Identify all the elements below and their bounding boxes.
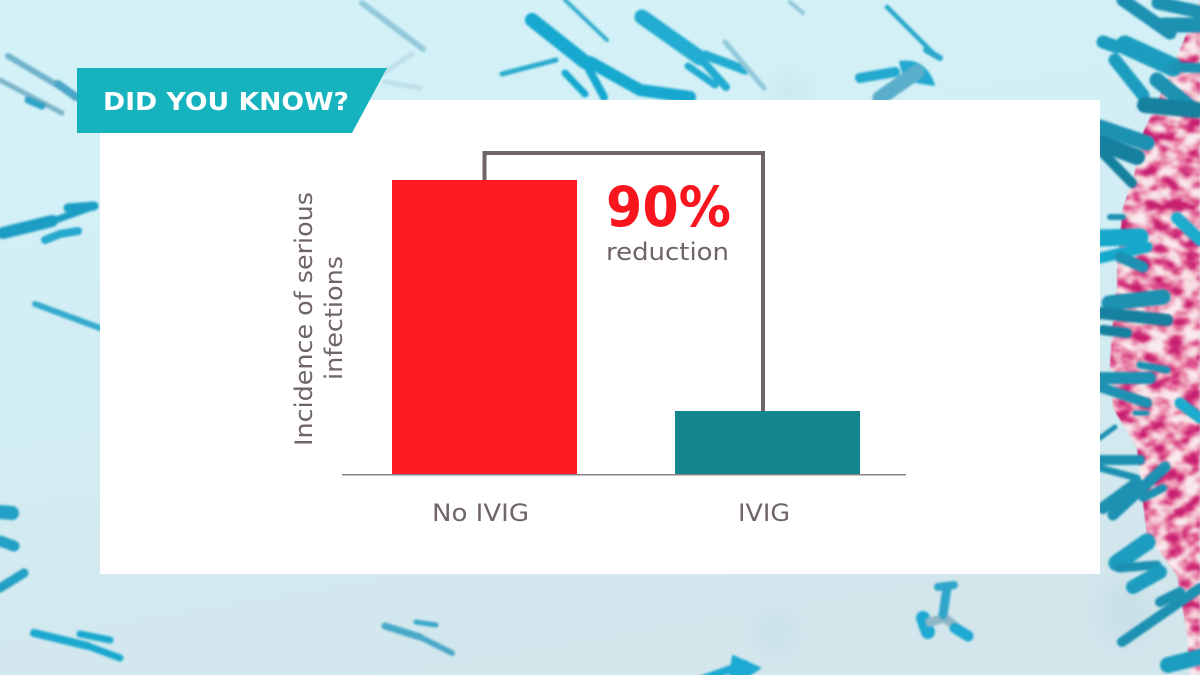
- callout: 90% reduction: 90%: [606, 175, 731, 239]
- pink virus surface: [1110, 0, 1200, 675]
- heading tag: did you know: [77, 68, 387, 133]
- y axis label: infections: [320, 256, 348, 380]
- y axis label: Incidence of serious: [290, 192, 318, 446]
- x label: No IVIG: No IVIG: [432, 499, 529, 527]
- panel: white card: [100, 100, 1100, 574]
- bar: No IVIG: [392, 180, 577, 475]
- x label: IVIG: IVIG: [738, 499, 790, 527]
- virus spikes: [1100, 0, 1200, 665]
- bar chart: incidence of serious infections: [290, 153, 906, 527]
- heading tag: did you know: DID YOU KNOW?: [103, 87, 349, 116]
- antibodies: left: [0, 206, 100, 588]
- bracket connector between bars: [484, 153, 763, 411]
- antibodies: top: [0, 0, 940, 113]
- bar: IVIG: [675, 411, 860, 475]
- soft shadows: [761, 78, 1147, 648]
- callout: 90% reduction: [606, 175, 731, 266]
- callout: 90% reduction: reduction: [606, 238, 729, 266]
- x axis: [342, 474, 906, 476]
- antibodies: bottom: [34, 585, 968, 675]
- y axis label: [290, 192, 348, 446]
